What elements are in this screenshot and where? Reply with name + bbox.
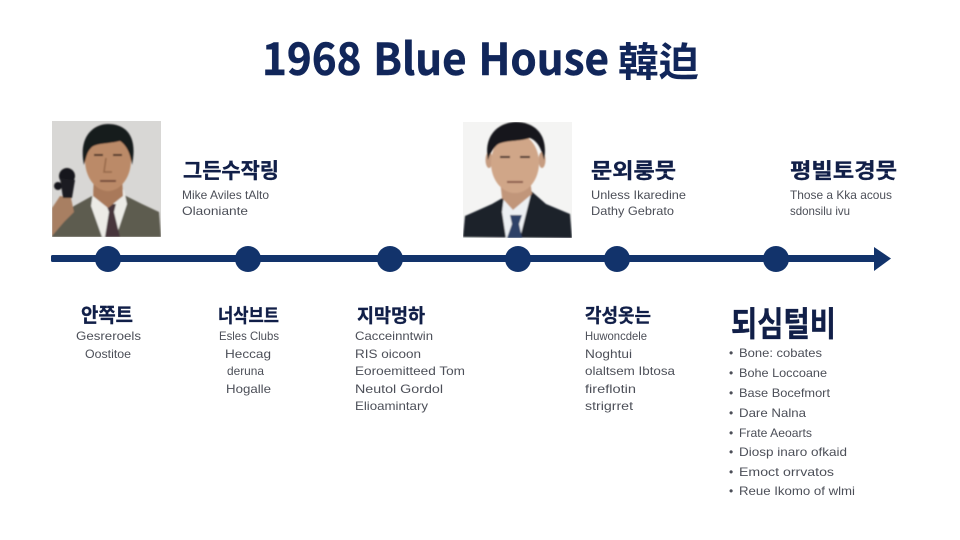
lower label 5: bulleted list: Base Bocefmort — [739, 386, 831, 400]
lower label 4 — [585, 305, 675, 413]
upper label 3: sdonsilu ivu — [790, 204, 850, 218]
upper label 2: Dathy Gebrato — [591, 204, 674, 218]
title: 1968 Blue House — [262, 24, 609, 88]
lower label 2: deruna — [227, 364, 264, 378]
lower label 2: 너삭브트 — [218, 305, 279, 327]
lower label 3: Cacceinntwin — [355, 329, 433, 343]
lower label 4: 각성옷는 — [585, 305, 651, 327]
upper label 1: 그든수작링 — [183, 160, 279, 183]
lower label 2: Heccag — [225, 347, 271, 361]
lower label 2: Hogalle — [226, 382, 271, 396]
upper label 2 — [591, 160, 686, 218]
upper label 1: Mike Aviles tAlto — [182, 188, 269, 202]
lower label 4: strigrret — [585, 399, 634, 413]
milestone dot 1 — [95, 246, 121, 272]
lower label 5: bulleted list — [729, 306, 855, 498]
lower label 2 — [218, 305, 279, 396]
lower label 3 — [355, 305, 465, 413]
upper label 3 — [790, 160, 897, 218]
lower label 5: bulleted list: • — [729, 386, 733, 400]
upper label 2: Unless Ikaredine — [591, 188, 686, 202]
lower label 3: 지막멍하 — [357, 305, 426, 327]
lower label 5: bulleted list: Frate Aeoarts — [739, 426, 812, 440]
lower label 5: bulleted list: • — [729, 366, 733, 380]
lower label 3: Elioamintary — [355, 399, 428, 413]
upper label 3: Those a Kka acous — [790, 188, 892, 202]
lower label 5: bulleted list: • — [729, 484, 733, 498]
lower label 5: bulleted list: 되심털비 — [731, 306, 836, 344]
lower label 1: 안쪽트 — [81, 304, 133, 327]
lower label 4: Noghtui — [585, 347, 632, 361]
milestone dot 5 — [604, 246, 630, 272]
lower label 1: Gesreroels — [76, 329, 141, 343]
milestone dot 6 — [763, 246, 789, 272]
lower label 1: Oostitoe — [85, 347, 131, 361]
lower label 5: bulleted list: • — [729, 445, 733, 459]
lower label 5: bulleted list: Emoct orrvatos — [739, 465, 834, 479]
lower label 4: olaltsem Ibtosa — [585, 364, 675, 378]
lower label 5: bulleted list: Diosp inaro ofkaid — [739, 445, 847, 459]
lower label 3: Eoroemitteed Tom — [355, 364, 465, 378]
upper label 2: 문외룽뭇 — [591, 160, 676, 183]
lower label 4: Huwoncdele — [585, 329, 647, 343]
lower label 3: Neutol Gordol — [355, 382, 443, 396]
milestone dot 3 — [377, 246, 403, 272]
upper label 3: 평빌토경뭇 — [790, 160, 897, 183]
lower label 5: bulleted list: Dare Nalna — [739, 406, 806, 420]
lower label 5: bulleted list: Bohe Loccoane — [739, 366, 827, 380]
milestone dot 2 — [235, 246, 261, 272]
upper label 1 — [182, 160, 279, 218]
lower label 5: bulleted list: • — [729, 406, 733, 420]
portrait: man with camera — [52, 121, 161, 237]
upper label 1: Olaoniante — [182, 204, 248, 218]
lower label 2: Esles Clubs — [219, 329, 279, 343]
milestone dot 4 — [505, 246, 531, 272]
lower label 5: bulleted list: • — [729, 346, 733, 360]
lower label 5: bulleted list: • — [729, 426, 733, 440]
title: 韓迫 — [618, 30, 699, 88]
lower label 5: bulleted list: Bone: cobates — [739, 346, 822, 360]
timeline arrow — [51, 246, 891, 272]
lower label 4: fireflotin — [585, 382, 636, 396]
portrait: man in dark suit — [463, 122, 572, 238]
lower label 5: bulleted list: Reue Ikomo of wlmi — [739, 484, 855, 498]
lower label 1 — [76, 304, 141, 361]
lower label 5: bulleted list: • — [729, 465, 733, 479]
lower label 3: RIS oicoon — [355, 347, 421, 361]
